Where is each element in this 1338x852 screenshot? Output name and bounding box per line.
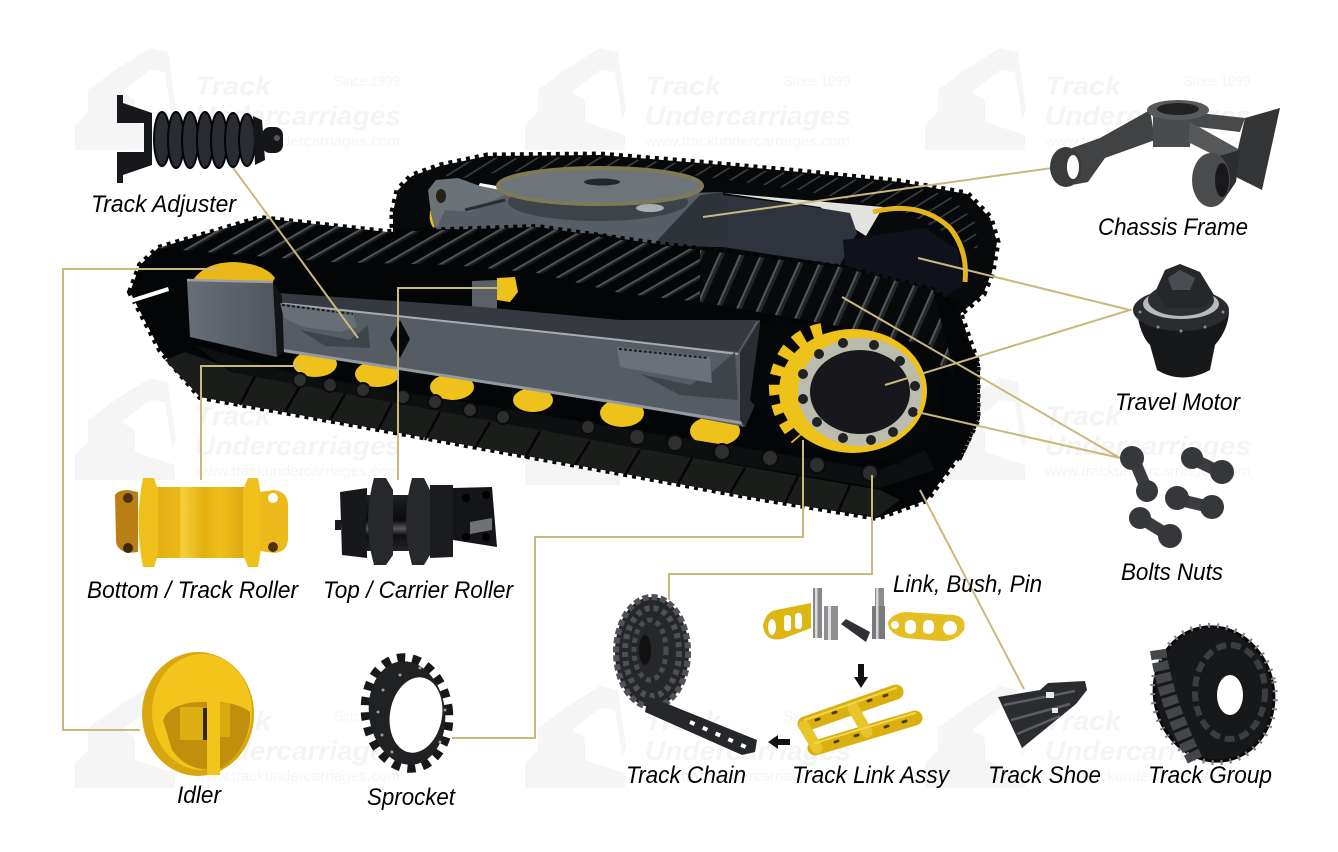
- label: track adjuster: Track Adjuster: [91, 191, 237, 218]
- chassis frame on machine: [428, 168, 965, 297]
- watermark bottom right: Track: [1045, 706, 1123, 736]
- watermark top left: Undercarriages: [195, 101, 401, 131]
- watermark middle right: Track: [1045, 401, 1123, 431]
- watermark middle right: [925, 378, 1251, 480]
- label: track link assy: Track Link Assy: [792, 762, 951, 789]
- icon: track adjuster: [117, 95, 283, 183]
- icon: track chain: [615, 597, 757, 755]
- icon: idler: [142, 652, 254, 776]
- watermark bottom left: Track: [195, 706, 273, 736]
- white slit: [130, 287, 169, 303]
- watermark bottom left: www.trackundercarriages.com: [194, 768, 400, 785]
- watermark middle centre: www.trackundercarriages.com: [644, 463, 850, 480]
- watermark top right: Undercarriages: [1045, 101, 1251, 131]
- watermark top centre: www.trackundercarriages.com: [644, 133, 850, 150]
- watermark bottom centre: Track: [645, 706, 723, 736]
- arrow: left: [768, 735, 790, 749]
- label: link bush pin: Link, Bush, Pin: [893, 571, 1042, 598]
- watermark bottom right: [925, 686, 1251, 788]
- watermark top right: Since 1999: [1184, 73, 1250, 90]
- watermark bottom centre: Undercarriages: [645, 736, 851, 766]
- watermark bottom right: Undercarriages: [1045, 736, 1251, 766]
- side frame: [187, 280, 760, 427]
- icon: track group: [1140, 614, 1288, 774]
- watermark bottom centre: Since 1999: [784, 708, 850, 725]
- watermark top right: www.trackundercarriages.com: [1044, 133, 1250, 150]
- watermark top centre: Since 1999: [784, 73, 850, 90]
- icon: track link assembly: [804, 688, 915, 748]
- watermark middle left: www.trackundercarriages.com: [194, 463, 400, 480]
- icon: link bush pin parts: [763, 588, 965, 642]
- watermark top left: Track: [195, 71, 273, 101]
- label: chassis frame: Chassis Frame: [1098, 214, 1248, 241]
- carrier roller on machine: [472, 277, 518, 320]
- watermark top right: [925, 48, 1251, 150]
- icon: top carrier roller: [335, 478, 497, 565]
- watermark bottom centre: [525, 686, 851, 788]
- watermark top left: www.trackundercarriages.com: [194, 133, 400, 150]
- arrow: down: [854, 664, 868, 688]
- label: track shoe: Track Shoe: [988, 762, 1101, 789]
- track chain links: [195, 345, 935, 488]
- main undercarriage illustration: [130, 155, 997, 518]
- icon: sprocket: [359, 653, 455, 773]
- watermark bottom left: Since 1999: [334, 708, 400, 725]
- icon: travel motor: [1133, 264, 1229, 378]
- watermark bottom centre: www.trackundercarriages.com: [644, 768, 850, 785]
- bottom roller row: [293, 351, 740, 446]
- label: track chain: Track Chain: [626, 762, 746, 789]
- label: track group: Track Group: [1148, 762, 1272, 789]
- watermark middle right: Undercarriages: [1045, 431, 1251, 461]
- watermark top centre: Track: [645, 71, 723, 101]
- label: bolts nuts: Bolts Nuts: [1121, 559, 1223, 586]
- watermark middle left: Track: [195, 401, 273, 431]
- sprocket on machine: [750, 318, 945, 465]
- watermark middle right: www.trackundercarriages.com: [1044, 463, 1250, 480]
- watermark top left: [75, 48, 401, 150]
- watermark bottom left: [75, 686, 401, 788]
- idler on machine: [193, 262, 275, 286]
- watermark top centre: Undercarriages: [645, 101, 851, 131]
- label: travel motor: Travel Motor: [1115, 389, 1241, 416]
- watermark middle left: [75, 378, 401, 480]
- icon: chassis frame: [1050, 100, 1280, 207]
- watermark bottom left: Undercarriages: [195, 736, 401, 766]
- icon: track shoe: [998, 681, 1087, 748]
- watermark bottom right: www.trackundercarriages.com: [1044, 768, 1250, 785]
- label: sprocket: Sprocket: [367, 784, 456, 811]
- rear track: [393, 155, 997, 455]
- connector lines: [63, 165, 1130, 738]
- icon: bottom track roller: [115, 478, 288, 567]
- label: idler: Idler: [177, 782, 222, 809]
- label: bottom track roller: Bottom / Track Roller: [87, 577, 299, 604]
- label: top carrier roller: Top / Carrier Roller: [323, 577, 514, 604]
- watermark top left: Since 1999: [334, 73, 400, 90]
- front track loop: [130, 218, 977, 518]
- watermark middle left: Undercarriages: [195, 431, 401, 461]
- watermark middle centre: [525, 447, 850, 485]
- watermark top centre: [525, 48, 851, 150]
- icon: bolts and nuts: [1120, 446, 1234, 548]
- watermark top right: Track: [1045, 71, 1123, 101]
